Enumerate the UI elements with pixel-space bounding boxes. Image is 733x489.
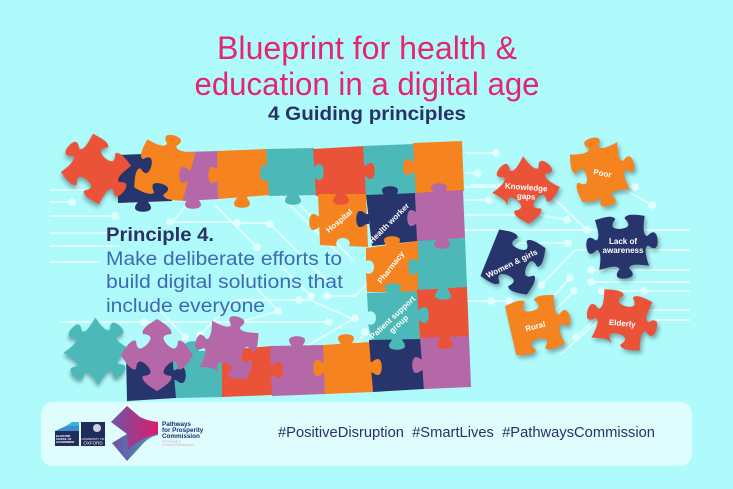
principle text: Principle 4. — [106, 225, 214, 246]
loose piece: purple on board — [118, 316, 196, 394]
barrier piece: Knowledge gaps: gaps — [517, 191, 536, 202]
title: education in a digital age — [194, 66, 540, 102]
logo: Pathways wordmark: Technology & — [162, 440, 182, 444]
logo: Pathways wordmark: Commission — [162, 433, 200, 440]
principle text — [106, 225, 344, 317]
barrier piece: Lack of awareness: awareness — [603, 246, 644, 255]
subtitle: 4 Guiding principles — [268, 104, 466, 125]
barrier piece: Poor: Poor — [593, 168, 612, 180]
bottom row pieces — [126, 336, 471, 401]
title — [194, 30, 540, 102]
right column pieces — [318, 190, 469, 341]
barrier piece: Lack of awareness: Lack of — [609, 237, 637, 246]
barrier piece: Poor — [565, 129, 643, 213]
barrier piece: Elderly — [580, 284, 664, 356]
loose piece: teal bottom left — [49, 303, 145, 399]
logo: University of Oxford: OXFORD — [83, 440, 103, 446]
logo: Pathways wordmark: for Prosperity — [162, 427, 204, 434]
barrier piece: Women and girls — [480, 227, 548, 297]
top row pieces — [117, 141, 464, 212]
logo: Pathways wordmark — [162, 421, 204, 447]
barrier piece: Lack of awareness — [584, 213, 661, 282]
piece label: Patient support group: Patient support — [368, 294, 417, 341]
logo: Blavatnik School: SCHOOL OF — [56, 437, 72, 441]
barrier piece: Knowledge gaps — [483, 142, 568, 227]
barrier piece: Women and girls: Women & girls — [485, 247, 539, 280]
logo: Blavatnik School: BLAVATNIK — [56, 434, 71, 438]
logo: Pathways wordmark: Pathways — [162, 421, 192, 428]
barrier piece: Knowledge gaps: Knowledge — [505, 182, 548, 194]
principle text: build digital solutions that — [106, 272, 344, 293]
loose piece: purple second — [189, 308, 263, 382]
logo: Blavatnik School: GOVERNMENT — [56, 440, 75, 444]
logo: Pathways wordmark: Inclusive Development — [162, 443, 194, 447]
barrier piece: Elderly: Elderly — [609, 318, 636, 329]
hashtags: #PositiveDisruption #SmartLives #PathwaysCommission — [278, 425, 655, 441]
logo: University of Oxford: UNIVERSITY OF — [82, 437, 105, 441]
piece knobs — [173, 159, 453, 383]
title: Blueprint for health & — [217, 30, 517, 66]
logo: Blavatnik School — [55, 422, 79, 446]
piece label: Hospital: Hospital — [324, 207, 354, 235]
logo: University of Oxford — [81, 422, 105, 446]
puzzle board — [117, 128, 471, 401]
principle text: include everyone — [106, 296, 265, 317]
overlapping orange piece — [132, 128, 198, 203]
piece label: Health worker: Health worker — [367, 201, 411, 245]
piece label: Pharmacy: Pharmacy — [376, 249, 407, 285]
barrier piece: Rural — [505, 290, 576, 357]
loose piece: red top left — [51, 125, 141, 213]
logo: Pathways mark — [111, 406, 158, 461]
footer panel — [41, 402, 692, 466]
barrier piece: Rural: Rural — [524, 320, 546, 334]
principle text: Make deliberate efforts to — [106, 249, 342, 270]
piece label: Patient support group: group — [387, 313, 410, 335]
